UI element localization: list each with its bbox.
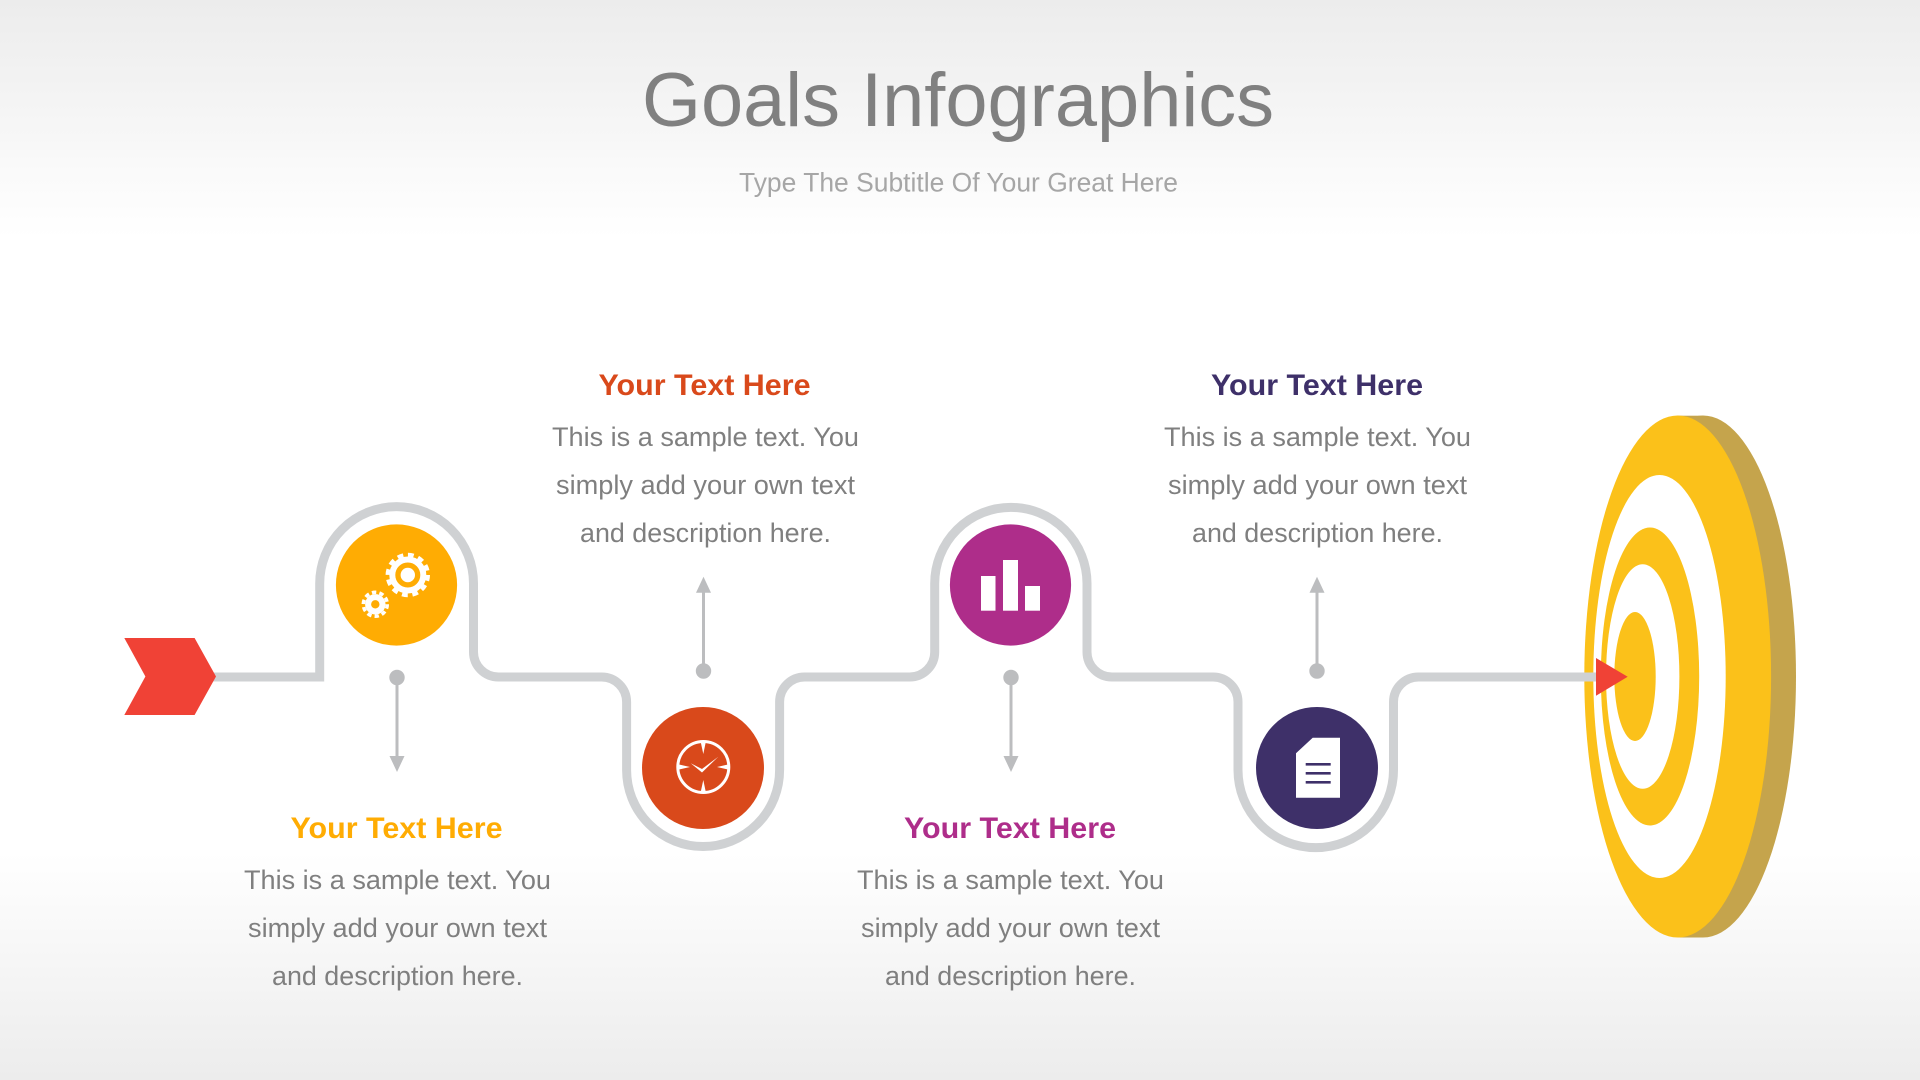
- step 3 icon: bar chart: [950, 524, 1071, 646]
- text block: step 2: [552, 369, 859, 548]
- arrow: step 3 down: [1003, 670, 1019, 772]
- arrow: step 2 up: [696, 577, 711, 679]
- step 2 icon: clock: [642, 707, 764, 829]
- step 1 icon: gears: [336, 524, 457, 646]
- text block: step 3: and description here.: [885, 961, 1136, 991]
- text block: step 2: and description here.: [580, 518, 831, 548]
- text block: step 2: Your Text Here: [598, 369, 810, 402]
- subtitle: Type The Subtitle Of Your Great Here: [739, 168, 1178, 198]
- text block: step 1: and description here.: [272, 961, 523, 991]
- target: [1584, 416, 1796, 938]
- text block: step 2: simply add your own text: [556, 470, 855, 500]
- text block: step 3: [857, 812, 1164, 991]
- text block: step 4: Your Text Here: [1211, 369, 1423, 402]
- title: Goals Infographics: [642, 58, 1274, 143]
- text block: step 1: simply add your own text: [248, 913, 547, 943]
- arrow: step 4 up: [1309, 577, 1325, 679]
- icon: start chevron: [124, 638, 216, 715]
- text block: step 3: This is a sample text. You: [857, 865, 1164, 895]
- winding path: [212, 507, 1600, 848]
- arrow: step 1 down: [389, 670, 405, 772]
- text block: step 4: and description here.: [1192, 518, 1443, 548]
- text block: step 3: Your Text Here: [904, 812, 1116, 845]
- text block: step 3: simply add your own text: [861, 913, 1160, 943]
- text block: step 2: This is a sample text. You: [552, 422, 859, 452]
- text block: step 4: [1164, 369, 1471, 548]
- text block: step 1: This is a sample text. You: [244, 865, 551, 895]
- step 4 icon: document: [1256, 707, 1378, 829]
- text block: step 1: [244, 812, 551, 991]
- text block: step 1: Your Text Here: [290, 812, 502, 845]
- text block: step 4: simply add your own text: [1168, 470, 1467, 500]
- text block: step 4: This is a sample text. You: [1164, 422, 1471, 452]
- icon: arrow head on target: [1596, 658, 1628, 696]
